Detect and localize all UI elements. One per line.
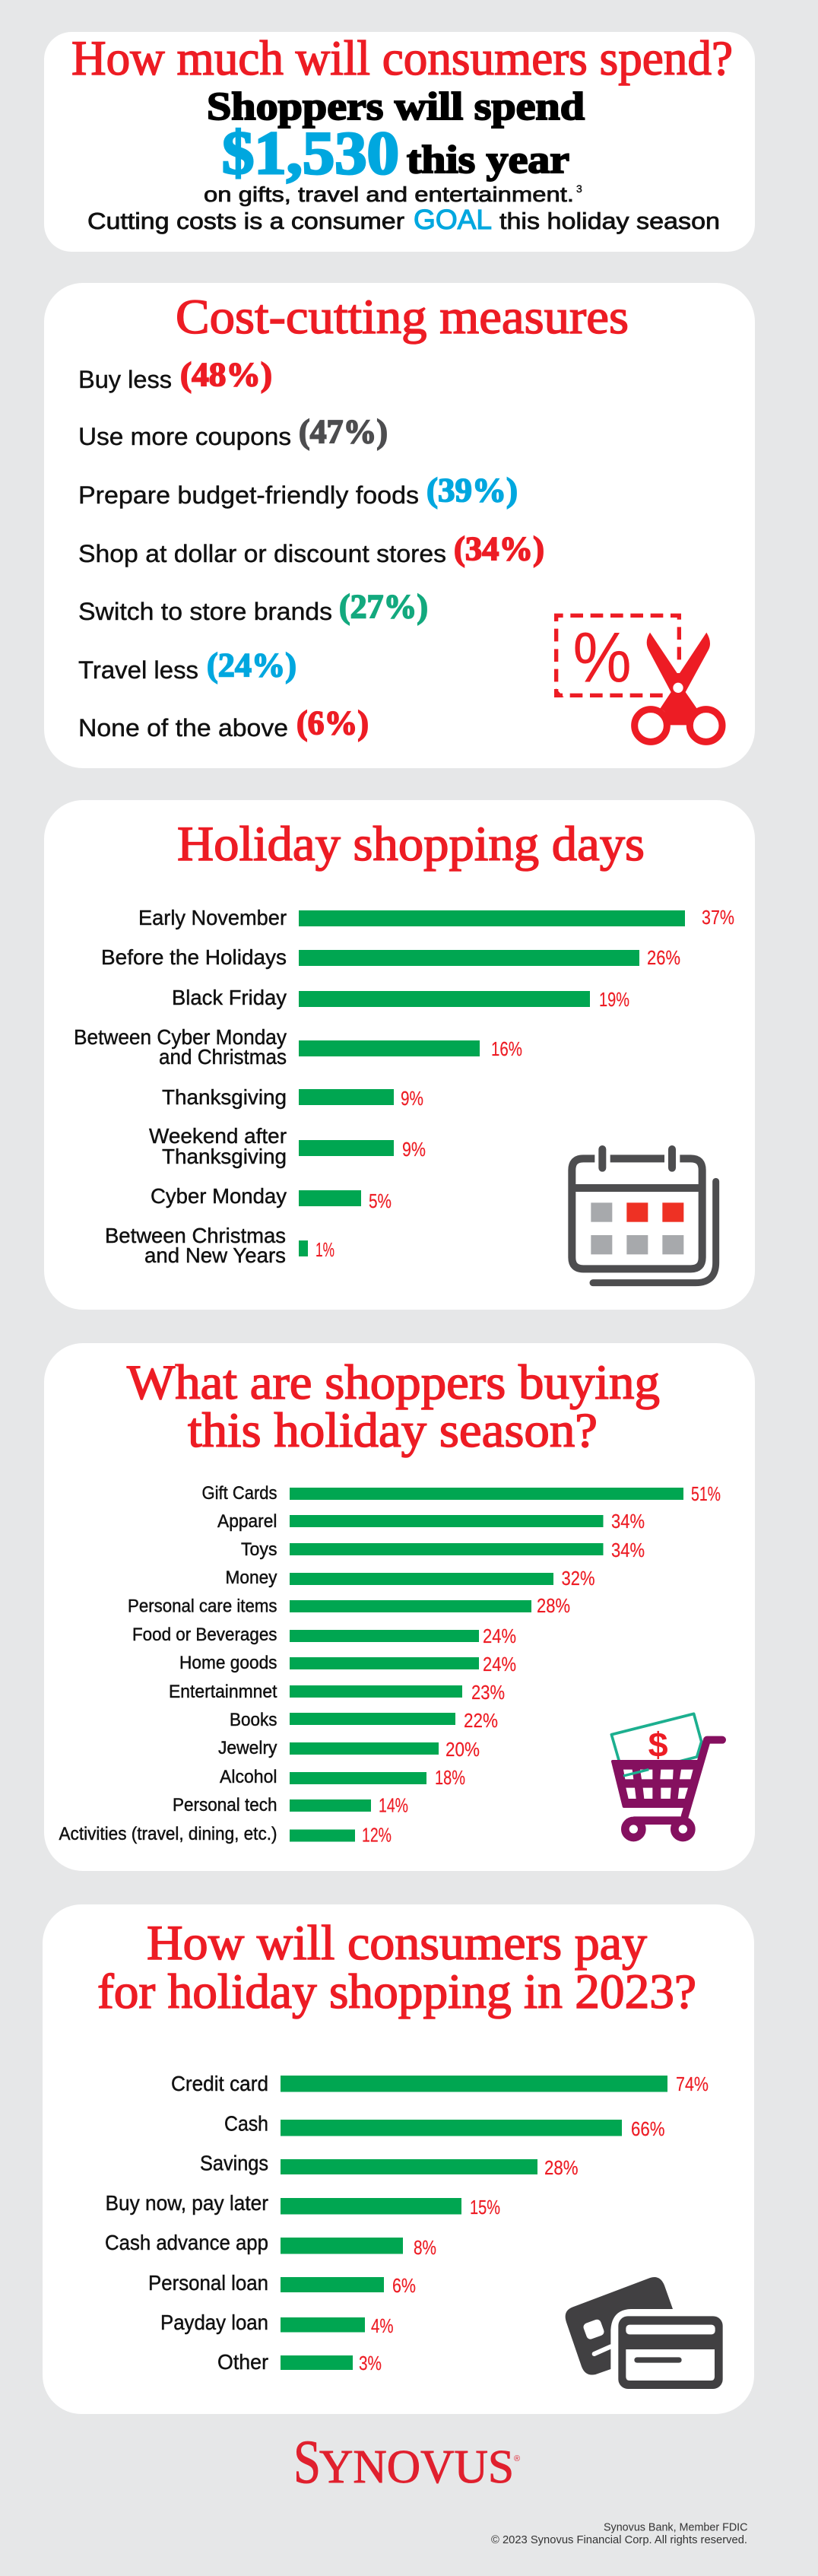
bar: cash 66%	[224, 2111, 664, 2140]
bar: gift cards 51%: Gift Cards	[202, 1483, 277, 1504]
heading: how will consumers pay for holiday shopping in 2023: How will consumers pay	[147, 1916, 647, 1971]
bar: weekend after thanksgiving 9%	[149, 1124, 426, 1168]
bar: cash advance app 8%	[105, 2231, 436, 2259]
heading: what are shoppers buying this holiday season: this holiday season?	[188, 1403, 598, 1458]
bar: other 3%	[217, 2350, 382, 2374]
bar: jewelry 20%	[218, 1738, 480, 1761]
bar: before the holidays 26%	[101, 945, 680, 969]
bar: books 22%	[230, 1709, 498, 1732]
bar: money 32%: 32%	[561, 1567, 594, 1590]
bar: jewelry 20%: Jewelry	[218, 1738, 277, 1758]
bar: credit card 74%: 74%	[676, 2073, 709, 2095]
bar: thanksgiving 9%: Thanksgiving	[162, 1085, 287, 1109]
item: prepare budget-friendly foods 39%: Prepare budget-friendly foods	[78, 481, 419, 509]
bar: payday loan 4%: 4%	[371, 2314, 394, 2337]
bar: entertainment 23%: 23%	[471, 1681, 505, 1704]
logo: synovus: ®	[514, 2454, 520, 2463]
logo: synovus: YNOVUS	[319, 2441, 514, 2493]
bar: entertainment 23%: Entertainmnet	[169, 1682, 277, 1702]
bar: before the holidays 26%: 26%	[647, 946, 680, 969]
bar: personal loan 6%: Personal loan	[148, 2271, 268, 2295]
item: prepare budget-friendly foods 39%	[78, 472, 518, 509]
item: none of the above 6%: None of the above	[78, 714, 288, 742]
item: use more coupons 47%: Use more coupons	[78, 423, 291, 450]
bar: toys 34%	[241, 1539, 645, 1561]
bar: other 3%: Other	[217, 2350, 268, 2374]
text: cutting costs is a consumer: Cutting costs is a consumer	[87, 208, 404, 234]
bar: alcohol 18%: Alcohol	[220, 1767, 277, 1787]
bar: cyber monday 5%	[151, 1184, 392, 1212]
bar: cash 66%: Cash	[224, 2111, 268, 2136]
bar: books 22%: Books	[230, 1710, 277, 1730]
footer: legal text: © 2023 Synovus Financial Corp. All rights reserved.	[491, 2533, 747, 2546]
bar: money 32%: Money	[225, 1568, 277, 1588]
heading: what are shoppers buying this holiday season	[127, 1355, 660, 1458]
bar: personal tech 14%	[173, 1793, 408, 1816]
item: none of the above 6%	[78, 704, 369, 742]
icon: credit cards	[566, 2277, 723, 2389]
item: shop at dollar or discount stores 34%: Shop at dollar or discount stores	[78, 540, 446, 567]
bar: weekend after thanksgiving 9%: 9%	[402, 1138, 426, 1161]
item: travel less 24%: Travel less	[78, 656, 198, 684]
item: use more coupons 47%	[78, 413, 388, 450]
bar: cyber monday 5%: Cyber Monday	[151, 1184, 287, 1208]
bar: home goods 24%: 24%	[483, 1653, 516, 1676]
icon: shopping cart with money: $	[648, 1725, 668, 1764]
footer: legal text: Synovus Bank, Member FDIC	[604, 2520, 748, 2534]
bar: cash 66%: 66%	[631, 2117, 664, 2140]
bar: between christmas and new years 1%: Between Christmas	[105, 1224, 286, 1247]
bar: early november 37%	[138, 906, 734, 929]
bar: alcohol 18%	[220, 1766, 465, 1789]
bar: buy now, pay later 15%: 15%	[470, 2196, 500, 2219]
icon: scissors cutting percent coupon: %	[572, 618, 632, 697]
stat: $1,530: $1,530	[222, 120, 399, 187]
bar: payday loan 4%: Payday loan	[160, 2311, 268, 2334]
bar: buy now, pay later 15%	[105, 2191, 500, 2219]
text: this holiday season: this holiday season	[499, 208, 720, 234]
heading: how will consumers pay for holiday shopping in 2023	[97, 1916, 696, 2019]
item: switch to store brands 27%: (27%)	[339, 588, 428, 625]
icon: calendar	[572, 1149, 716, 1283]
bar: weekend after thanksgiving 9%: Weekend after	[149, 1124, 287, 1148]
heading: how will consumers pay for holiday shopping in 2023: for holiday shopping in 2023?	[97, 1965, 696, 2019]
logo: synovus: S	[293, 2427, 321, 2496]
bar: thanksgiving 9%	[162, 1085, 423, 1110]
bar: activities 12%	[59, 1824, 392, 1847]
heading: holiday shopping days: Holiday shopping days	[177, 817, 645, 872]
bar: between christmas and new years 1%: and New Years	[144, 1244, 286, 1267]
bar: between christmas and new years 1%: 1%	[315, 1238, 334, 1261]
heading: what are shoppers buying this holiday season: What are shoppers buying	[127, 1355, 660, 1410]
bar: personal tech 14%: 14%	[379, 1793, 408, 1816]
bar: personal care items 28%: Personal care items	[128, 1596, 277, 1617]
bar: personal loan 6%: 6%	[392, 2274, 416, 2297]
logo: synovus	[293, 2427, 520, 2496]
footer: legal text	[491, 2520, 748, 2546]
emphasis: goal: GOAL	[414, 204, 492, 235]
bar: credit card 74%: Credit card	[171, 2072, 268, 2095]
bar: personal tech 14%: Personal tech	[173, 1795, 277, 1815]
bar: apparel 34%: Apparel	[217, 1511, 277, 1532]
bar: gift cards 51%	[202, 1482, 721, 1505]
item: none of the above 6%: (6%)	[296, 704, 369, 742]
bar: toys 34%: 34%	[611, 1539, 645, 1561]
bar: personal care items 28%	[128, 1594, 570, 1617]
panel: what are shoppers buying	[44, 1343, 755, 1871]
bar: toys 34%: Toys	[241, 1539, 277, 1560]
bar: early november 37%: Early November	[138, 906, 287, 929]
bar: entertainment 23%	[169, 1681, 505, 1704]
bar: between christmas and new years 1%	[105, 1224, 334, 1267]
icon: scissors cutting percent coupon	[556, 615, 722, 742]
bar: between cyber monday and christmas 16%: and Christmas	[159, 1045, 287, 1069]
bar chart: what shoppers are buying	[59, 1482, 721, 1847]
text: this year: this year	[407, 138, 569, 182]
bar: apparel 34%: 34%	[611, 1510, 645, 1533]
bar: savings 28%: Savings	[200, 2151, 268, 2175]
icon: shopping cart with money	[611, 1714, 722, 1838]
bar: home goods 24%: Home goods	[179, 1653, 277, 1673]
bar: food or beverages 24%	[132, 1625, 516, 1647]
bar: thanksgiving 9%: 9%	[401, 1087, 423, 1110]
bar: home goods 24%	[179, 1653, 516, 1676]
item: travel less 24%	[78, 646, 296, 684]
bar: books 22%: 22%	[464, 1709, 498, 1732]
bar: gift cards 51%: 51%	[691, 1482, 721, 1505]
item: buy less 48%: (48%)	[180, 356, 272, 393]
bar: personal care items 28%: 28%	[537, 1594, 570, 1617]
panel: holiday shopping days	[44, 800, 755, 1310]
text: on gifts, travel and entertainment: on gifts, travel and entertainment.	[204, 183, 574, 206]
item: buy less 48%: Buy less	[78, 366, 172, 393]
bar: activities 12%: 12%	[362, 1824, 392, 1847]
bar: food or beverages 24%: 24%	[483, 1625, 516, 1647]
bar: cash advance app 8%: 8%	[414, 2236, 436, 2259]
bar: between cyber monday and christmas 16%	[74, 1025, 522, 1069]
bar: savings 28%	[200, 2151, 578, 2179]
bar: black friday 19%: 19%	[599, 988, 629, 1011]
bar: between cyber monday and christmas 16%: 16%	[491, 1037, 522, 1060]
panel: how will consumers pay	[43, 1904, 754, 2414]
bar: payday loan 4%	[160, 2311, 394, 2337]
heading: how much will consumers spend: How much will consumers spend?	[71, 31, 733, 86]
bar: black friday 19%	[172, 986, 629, 1011]
heading: cost-cutting measures: Cost-cutting measures	[176, 290, 629, 345]
item: buy less 48%	[78, 356, 272, 393]
bar: weekend after thanksgiving 9%: Thanksgiving	[162, 1145, 287, 1168]
bar: alcohol 18%: 18%	[435, 1766, 465, 1789]
footnote marker 3: 3	[576, 183, 582, 195]
bar: food or beverages 24%: Food or Beverages	[132, 1625, 277, 1645]
bar: jewelry 20%: 20%	[445, 1738, 480, 1761]
bar: activities 12%: Activities (travel, dining, etc.)	[59, 1824, 277, 1844]
bar: savings 28%: 28%	[544, 2156, 578, 2179]
bar: cash advance app 8%: Cash advance app	[105, 2231, 268, 2254]
panel: how much will consumers spend	[44, 31, 755, 252]
item: prepare budget-friendly foods 39%: (39%)	[426, 472, 518, 509]
item: shop at dollar or discount stores 34%	[78, 530, 544, 567]
item: travel less 24%: (24%)	[207, 646, 296, 684]
bar: money 32%	[225, 1567, 594, 1590]
item: switch to store brands 27%: Switch to store brands	[78, 598, 332, 625]
bar: other 3%: 3%	[359, 2352, 382, 2374]
bar: early november 37%: 37%	[702, 906, 734, 929]
bar chart: holiday shopping days	[74, 906, 734, 1267]
bar chart: payment methods	[105, 2072, 709, 2374]
bar: buy now, pay later 15%: Buy now, pay later	[105, 2191, 268, 2215]
bar: between cyber monday and christmas 16%: Between Cyber Monday	[74, 1025, 287, 1049]
bar: credit card 74%	[171, 2072, 709, 2095]
item: shop at dollar or discount stores 34%: (34%)	[454, 530, 544, 567]
bar: black friday 19%: Black Friday	[172, 986, 287, 1009]
bar: before the holidays 26%: Before the Holidays	[101, 945, 287, 969]
text: shoppers will spend: Shoppers will spend	[207, 85, 585, 129]
item: use more coupons 47%: (47%)	[299, 413, 388, 450]
bar: cyber monday 5%: 5%	[369, 1190, 392, 1212]
item: switch to store brands 27%	[78, 588, 428, 625]
bar: apparel 34%	[217, 1510, 645, 1533]
panel: cost-cutting measures	[44, 283, 755, 768]
bar: personal loan 6%	[148, 2271, 416, 2297]
